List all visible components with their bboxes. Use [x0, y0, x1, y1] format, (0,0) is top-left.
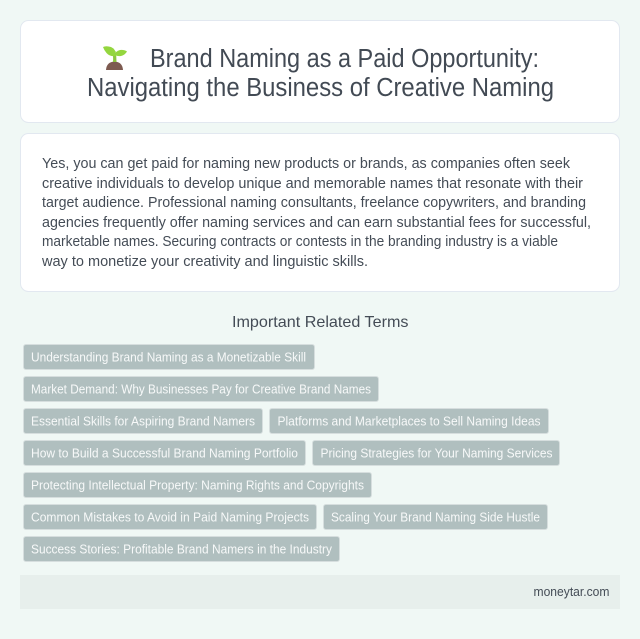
icon: seedling: [103, 46, 127, 70]
title: Navigating the Business of Creative Naming: [87, 74, 554, 102]
title: [87, 45, 554, 102]
title: Brand Naming as a Paid Opportunity:: [150, 45, 539, 73]
text block: answer paragraph: target audience. Professional naming consultants, freelance copywriters, and branding: [42, 194, 586, 211]
tag: Market Demand: Why Businesses Pay for Creative Brand Names: [31, 382, 371, 396]
panel: intro text card: [20, 134, 620, 292]
text block: answer paragraph: agencies frequently offer naming services and can earn substantial fees for successful,: [42, 214, 591, 231]
heading: important related terms: Important Related Terms: [232, 314, 408, 331]
footer bar: [20, 575, 620, 609]
tag: How to Build a Successful Brand Naming Portfolio: [31, 446, 298, 460]
tag: Pricing Strategies for Your Naming Services: [320, 446, 553, 460]
text block: answer paragraph: way to monetize your creativity and linguistic skills.: [41, 253, 368, 270]
tag: [24, 536, 340, 562]
tag: Understanding Brand Naming as a Monetizable Skill: [31, 350, 306, 364]
tag: Common Mistakes to Avoid in Paid Naming Projects: [31, 510, 309, 524]
tag: [312, 440, 560, 466]
footer source label: moneytar.com: [534, 584, 610, 599]
tag: Success Stories: Profitable Brand Namers in the Industry: [31, 542, 332, 556]
tag: Protecting Intellectual Property: Naming Rights and Copyrights: [31, 478, 364, 492]
tag: [270, 408, 548, 434]
tag: [24, 472, 372, 498]
tag: [24, 504, 316, 530]
tag: [24, 408, 262, 434]
text block: answer paragraph: creative individuals to develop unique and memorable names that resonate with their: [42, 175, 583, 192]
tag: [24, 344, 314, 370]
tag: Scaling Your Brand Naming Side Hustle: [331, 510, 540, 524]
tag: [24, 440, 306, 466]
text block: answer paragraph: Yes, you can get paid for naming new products or brands, as companies often seek: [42, 155, 570, 172]
text block: answer paragraph: marketable names. Securing contracts or contests in the branding industry is a viable: [42, 233, 558, 250]
tag: [24, 376, 378, 402]
tag: Platforms and Marketplaces to Sell Naming Ideas: [278, 414, 541, 428]
panel: title card: [20, 20, 620, 122]
text block: answer paragraph: [41, 155, 591, 270]
tag: [324, 504, 548, 530]
tag: Essential Skills for Aspiring Brand Namers: [31, 414, 255, 428]
tag list: [24, 344, 560, 562]
